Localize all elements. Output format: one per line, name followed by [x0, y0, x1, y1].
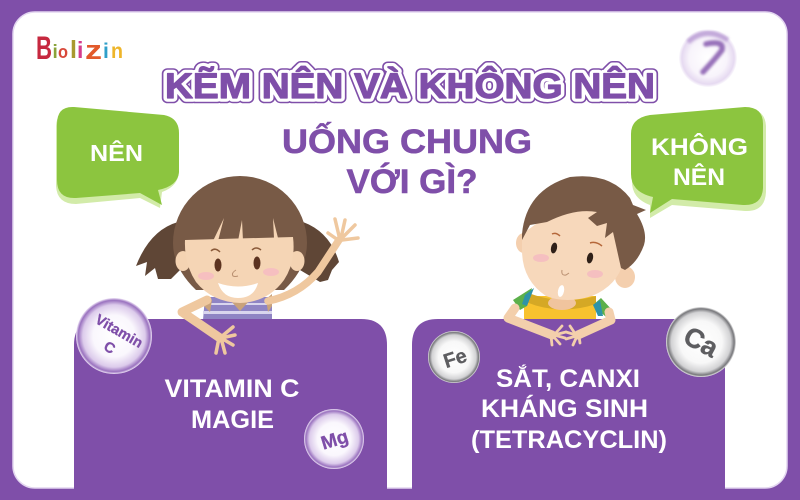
logo: Biolizin: o: [58, 42, 68, 62]
panel: should not take with: KHÁNG SINH: [481, 394, 648, 423]
girl nose: [232, 270, 238, 276]
boy neck: [548, 296, 576, 310]
logo: Biolizin: i: [103, 40, 109, 63]
boy eyes: [550, 242, 558, 254]
logo: Biolizin: l: [70, 36, 77, 64]
girl raised arm: [268, 240, 339, 301]
illustration: boy: [513, 176, 646, 319]
logo: Biolizin: z: [85, 35, 102, 65]
subtitle: UỐNG CHUNG: [282, 122, 532, 161]
subtitle: VỚI GÌ?: [346, 163, 478, 201]
girl hair: [173, 176, 307, 290]
boy nose: [562, 270, 569, 275]
vitamin c bubble: [76, 298, 152, 374]
panel: should take with: MAGIE: [191, 406, 274, 434]
girl lower arm and hand: [182, 300, 235, 353]
panel: should take with: [74, 300, 387, 490]
speech bubble: không nên: KHÔNG: [651, 133, 748, 161]
mg bubble: [304, 409, 364, 469]
girl ears: [176, 251, 190, 271]
girl top: [203, 297, 272, 320]
title: KẼM NÊN VÀ KHÔNG NÊN: [165, 66, 655, 106]
boy brows: [552, 233, 602, 246]
girl smile: [218, 283, 258, 298]
girl eyes: [214, 258, 222, 272]
vitamin c bubble: Vitamin: [92, 312, 145, 352]
speech bubble: nên: NÊN: [90, 139, 143, 166]
panel: should not take with: (TETRACYCLIN): [471, 426, 667, 454]
speech bubble: nên: [56, 107, 179, 208]
logo: Biolizin: B: [36, 30, 52, 66]
panel: should take with: VITAMIN C: [164, 375, 300, 403]
logo: Biolizin: [36, 30, 123, 66]
fe bubble: Fe: [441, 345, 470, 373]
boy forearms and hands: [508, 308, 611, 345]
boy mouth: [557, 285, 565, 297]
boy sleeves: [513, 288, 532, 310]
girl brows: [211, 248, 261, 252]
girl cheeks: [198, 272, 214, 280]
logo: Biolizin: n: [111, 40, 123, 63]
panel: should not take with: [412, 308, 725, 490]
illustration: girl: [136, 176, 358, 320]
boy hair: [522, 176, 646, 270]
ca bubble: Ca: [679, 321, 724, 364]
logo: Biolizin: i: [52, 42, 58, 63]
title: KẼM NÊN VÀ KHÔNG NÊN: [165, 66, 655, 106]
subtitle: [282, 122, 532, 201]
boy cheeks: [533, 254, 549, 262]
speech bubble: không nên: NÊN: [673, 163, 725, 191]
icon: question mark bubble: [679, 29, 737, 87]
girl raised hand: [328, 219, 358, 240]
speech bubble: không nên: [631, 107, 766, 218]
mg bubble: Mg: [319, 426, 351, 455]
vitamin c bubble: C: [101, 339, 118, 358]
girl face: [185, 237, 294, 303]
boy ears: [516, 233, 532, 253]
girl pigtails: [136, 222, 182, 279]
ca bubble: [666, 307, 736, 377]
title: KẼM NÊN VÀ KHÔNG NÊN: [165, 66, 655, 106]
panel: should not take with: SẮT, CANXI: [496, 363, 640, 393]
fe bubble: [428, 331, 480, 383]
logo: Biolizin: i: [77, 37, 83, 63]
boy shirt: [524, 296, 596, 319]
boy face: [522, 210, 623, 300]
